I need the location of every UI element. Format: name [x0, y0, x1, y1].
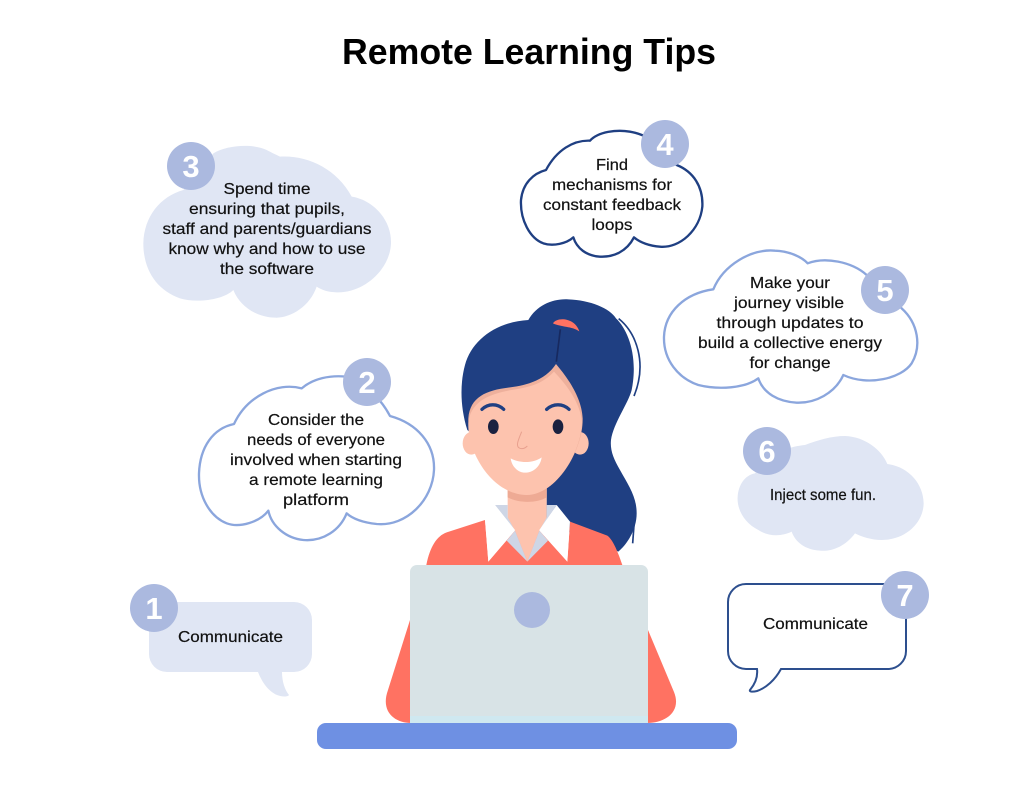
- neck shadow: [508, 487, 547, 502]
- badge 5: 5: [876, 273, 894, 308]
- text: tip 4: [543, 157, 682, 234]
- panel: tip 2 cloud: [199, 358, 434, 540]
- text: tip 3: the software: [220, 261, 314, 278]
- badge 2: 2: [358, 365, 376, 400]
- badge 1: 1: [145, 591, 163, 626]
- panel: tip 7 speech bubble: [728, 571, 929, 692]
- collar: [485, 505, 570, 562]
- hair strands: [619, 319, 640, 543]
- right arm: [647, 630, 676, 723]
- text: tip 2: [230, 412, 402, 509]
- hair part line: [556, 329, 560, 362]
- hair: [461, 299, 637, 552]
- neck: [508, 480, 547, 562]
- text: tip 5: [698, 275, 882, 372]
- cloud shape 6: [738, 436, 924, 551]
- badge 3: [167, 142, 215, 190]
- desk: [317, 723, 737, 749]
- text: tip 5: for change: [750, 355, 831, 372]
- cloud shape 3: [143, 146, 391, 318]
- text: tip 3: staff and parents/guardians: [162, 221, 372, 238]
- text: tip 3: Spend time: [224, 181, 311, 198]
- eyes: [488, 419, 563, 434]
- text: tip 4: mechanisms for: [552, 177, 673, 194]
- badge 4: [641, 120, 689, 168]
- badge 6: [743, 427, 791, 475]
- text: tip 4: constant feedback: [543, 197, 682, 214]
- text: tip 2: a remote learning: [249, 472, 383, 489]
- text: tip 2: involved when starting: [230, 452, 402, 469]
- left arm: [386, 620, 411, 723]
- ears: [463, 432, 589, 455]
- text: tip 5: journey visible: [733, 295, 844, 312]
- bubble shape 7: [728, 584, 906, 692]
- illustration: student at laptop: [317, 299, 737, 749]
- badge 7: 7: [896, 578, 914, 613]
- text: tip 3: know why and how to use: [168, 241, 366, 258]
- badge 2: [343, 358, 391, 406]
- badge 1: [130, 584, 178, 632]
- badge 3: 3: [182, 149, 200, 184]
- text: tip 5: through updates to: [716, 315, 864, 332]
- cloud shape 2: [199, 376, 434, 540]
- panel: tip 3 cloud: [143, 142, 391, 318]
- text: tip 5: Make your: [750, 275, 831, 292]
- badge 4: 4: [656, 127, 674, 162]
- text: tip 1: Communicate: [178, 629, 283, 646]
- badge 7: [881, 571, 929, 619]
- face: [468, 364, 583, 495]
- smile: [511, 457, 542, 473]
- text: tip 6: Inject some fun.: [770, 487, 876, 504]
- face highlight: [468, 372, 582, 495]
- panel: tip 5 cloud: [664, 250, 917, 403]
- text: tip 7: Communicate: [763, 616, 868, 633]
- text: tip 3: [162, 181, 372, 278]
- sweater: [426, 520, 622, 565]
- text: tip 4: Find: [596, 157, 628, 174]
- bubble shape 1: [149, 602, 312, 696]
- inner collar: [495, 505, 557, 562]
- text: tip 4: loops: [592, 217, 632, 234]
- text: tip 3: ensuring that pupils,: [189, 201, 345, 218]
- nose: [517, 432, 527, 449]
- text: tip 2: needs of everyone: [247, 432, 385, 449]
- text: tip 2: platform: [283, 492, 349, 509]
- text: tip 2: Consider the: [268, 412, 364, 429]
- panel: tip 4 cloud: [521, 120, 702, 257]
- panel: tip 1 speech bubble: [130, 584, 312, 696]
- cloud shape 5: [664, 250, 917, 403]
- eyebrows: [482, 405, 569, 409]
- laptop: [410, 565, 648, 723]
- cloud shape 4: [521, 131, 702, 257]
- badge 5: [861, 266, 909, 314]
- character head and torso: [426, 299, 640, 565]
- panel: tip 6 cloud: [738, 427, 924, 551]
- hair tie: [553, 319, 579, 331]
- title: Remote Learning Tips: [342, 31, 716, 72]
- text: tip 5: build a collective energy: [698, 335, 882, 352]
- badge 6: 6: [758, 434, 776, 469]
